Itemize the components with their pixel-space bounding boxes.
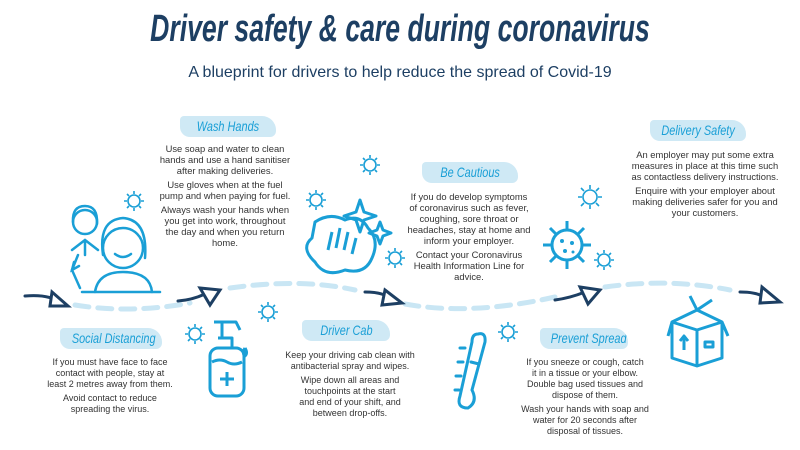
subtitle: A blueprint for drivers to help reduce the spread of Covid-19 — [188, 64, 612, 81]
text: be cautious: inform your employer. — [424, 235, 514, 246]
text: be cautious: Contact your Coronavirus — [416, 249, 522, 260]
text: delivery safety: An employer may put some extra — [636, 149, 774, 160]
text: social distancing: spreading the virus. — [71, 404, 149, 414]
text: social distancing: contact with people, stay at — [56, 368, 164, 378]
text: prevent spread: dispose of them. — [552, 390, 618, 400]
text: delivery safety: measures in place at this time such — [632, 160, 778, 171]
label: delivery safety — [650, 120, 746, 141]
text: delivery safety: Enquire with your employer about — [635, 185, 775, 196]
text: prevent spread: disposal of tissues. — [547, 426, 623, 436]
text: driver cab: between drop-offs. — [313, 408, 387, 418]
text: social distancing: Avoid contact to reduce — [63, 393, 157, 403]
text: wash hands: home. — [212, 237, 238, 248]
text: wash hands: hands and use a hand sanitiser — [160, 154, 290, 165]
text: wash hands: Use soap and water to clean — [166, 143, 284, 154]
text: be cautious: of coronavirus such as fever, — [409, 202, 529, 213]
section: prevent spread — [521, 328, 649, 436]
label: be cautious: Be Cautious — [440, 164, 500, 180]
text: delivery safety — [632, 149, 778, 218]
text: be cautious: If you do develop symptoms — [411, 191, 527, 202]
text: wash hands: you get into work, throughout — [165, 215, 285, 226]
label: be cautious — [422, 162, 518, 183]
text: be cautious: Health Information Line for — [414, 260, 524, 271]
label: driver cab: Driver Cab — [320, 322, 372, 338]
label: wash hands: Wash Hands — [197, 118, 259, 134]
text: driver cab: and end of your shift, and — [299, 397, 401, 407]
section: social distancing — [47, 328, 173, 414]
label: driver cab — [302, 320, 390, 341]
text: delivery safety: making deliveries safer for you and — [632, 196, 778, 207]
text: wash hands: pump and when paying for fuel. — [160, 190, 290, 201]
text: be cautious: coughing, sore throat or — [419, 213, 519, 224]
text: wash hands: after making deliveries. — [177, 165, 273, 176]
text: driver cab: Wipe down all areas and — [301, 375, 399, 385]
section: delivery safety — [632, 120, 778, 218]
text: driver cab: Keep your driving cab clean with — [285, 350, 415, 360]
text: social distancing — [47, 357, 173, 414]
label: social distancing: Social Distancing — [72, 330, 156, 346]
text: be cautious — [407, 191, 530, 282]
text: prevent spread: water for 20 seconds after — [533, 415, 637, 425]
text: driver cab: touchpoints at the start — [304, 386, 396, 396]
text: wash hands: the day and when you return — [166, 226, 284, 237]
text: driver cab — [285, 350, 415, 418]
section: be cautious — [407, 162, 530, 282]
title: Driver safety & care during coronavirus — [150, 8, 650, 50]
text: prevent spread: Double bag used tissues and — [527, 379, 643, 389]
text: delivery safety: your customers. — [672, 207, 738, 218]
text: wash hands: Use gloves when at the fuel — [167, 179, 283, 190]
text: be cautious: headaches, stay at home and — [407, 224, 530, 235]
label: prevent spread: Prevent Spread — [551, 330, 627, 346]
text: social distancing: If you must have face to face — [52, 357, 168, 367]
text: delivery safety: as contactless delivery instructions. — [632, 171, 778, 182]
section: wash hands — [160, 116, 290, 248]
label: wash hands — [180, 116, 276, 137]
text: prevent spread: If you sneeze or cough, catch — [526, 357, 644, 367]
text: prevent spread: it in a tissue or your elbow. — [532, 368, 638, 378]
text: prevent spread: Wash your hands with soap and — [521, 404, 649, 414]
text: be cautious: advice. — [454, 271, 484, 282]
text: driver cab: antibacterial spray and wipes. — [291, 361, 409, 371]
label: prevent spread — [540, 328, 628, 349]
text: prevent spread — [521, 357, 649, 436]
section: driver cab — [285, 320, 415, 418]
label: delivery safety: Delivery Safety — [661, 122, 735, 138]
text: wash hands — [160, 143, 290, 248]
text: social distancing: least 2 metres away from them. — [47, 379, 173, 389]
label: social distancing — [60, 328, 162, 349]
text: wash hands: Always wash your hands when — [161, 204, 289, 215]
